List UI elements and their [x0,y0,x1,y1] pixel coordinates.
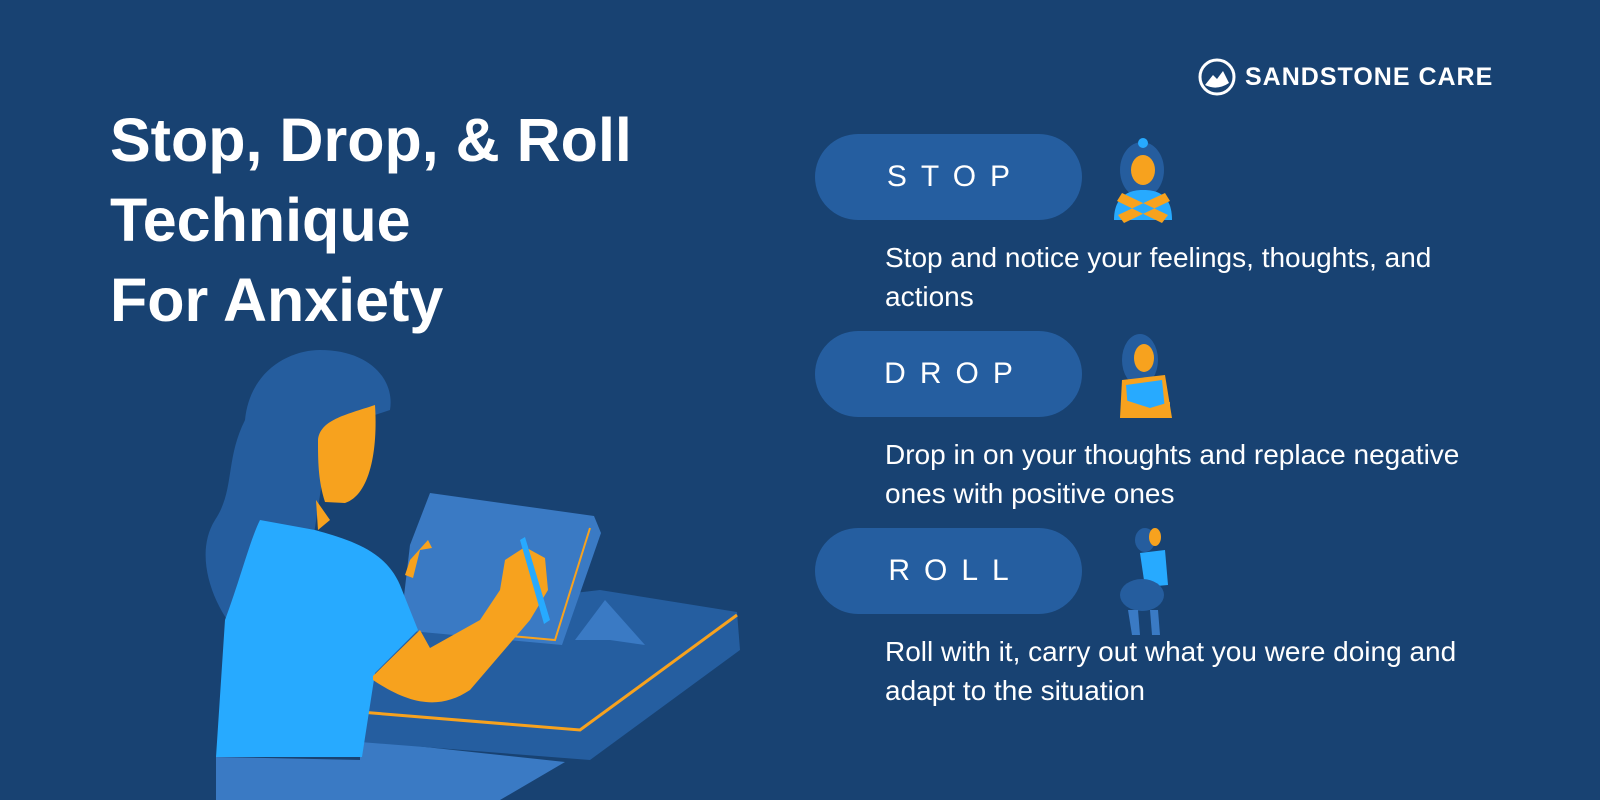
pill: roll [815,528,1082,614]
text: roll: Roll with it, carry out what you were doing and adapt to the situation [885,636,1456,706]
pill: roll: ROLL [888,554,1023,587]
text: drop: Drop in on your thoughts and replace negative ones with positive ones [885,439,1459,509]
logo: SANDSTONE CARE [1245,63,1493,91]
title: Technique [110,186,411,254]
pill: drop: DROP [884,357,1027,390]
title: For Anxiety [110,266,443,334]
icon: roll figure [1120,528,1168,635]
icon: stop figure [1114,138,1172,223]
illustration: woman at desk [206,350,740,800]
title: Stop, Drop, & Roll [110,106,632,174]
pill: stop [815,134,1082,220]
title [110,106,632,334]
text: stop: Stop and notice your feelings, thoughts, and actions [885,242,1431,312]
logo [1198,58,1493,96]
pill: stop: STOP [887,160,1024,193]
icon: drop figure [1120,334,1172,418]
pill: drop [815,331,1082,417]
